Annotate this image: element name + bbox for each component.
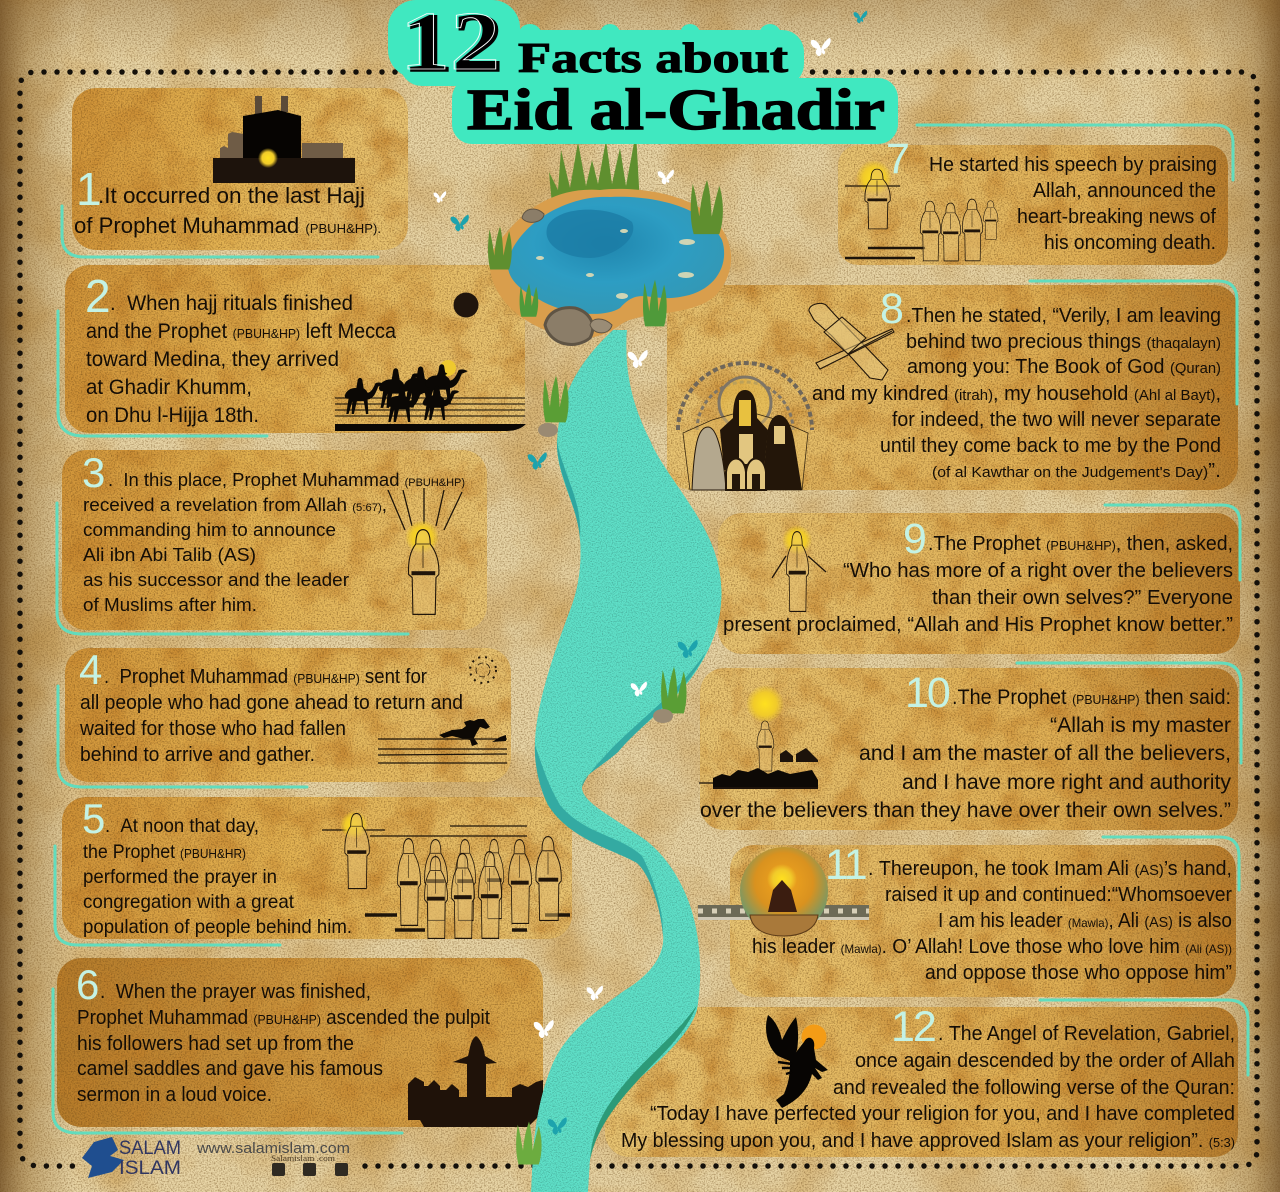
panel: fact 2 (65, 265, 526, 433)
panel 9 text (723, 533, 1233, 636)
panel 5 text: the Prophet (PBUH&HR) (83, 841, 246, 863)
number 10: 10 (905, 669, 950, 717)
icon: pond rocks (522, 209, 612, 344)
panel 7 text: Allah, announced the (1033, 180, 1216, 202)
title line Eid al-Ghadir: Eid al-Ghadir (467, 77, 885, 142)
panel 11 text (752, 858, 1232, 984)
panel 2 background (65, 265, 525, 433)
panel 5 text: congregation with a great (83, 891, 295, 913)
panel 1 text: of Prophet Muhammad (PBUH&HP). (74, 213, 381, 238)
panel 2 text: . When hajj rituals finished (110, 292, 353, 315)
teal butterflies (451, 11, 867, 1135)
number 1: 1 (76, 163, 102, 215)
panel 11 text: raised it up and continued:“Whomsoever (885, 884, 1232, 906)
icon: Kaaba with crowd (213, 96, 355, 183)
panel: fact 1 (72, 88, 408, 250)
panel 12 text: once again descended by the order of Allah (855, 1050, 1235, 1072)
icon: dark moon (454, 292, 478, 318)
panel 4 text (79, 666, 463, 766)
icon: Prophet leading prayer with congregation (322, 811, 570, 938)
panel: fact 6 (57, 958, 543, 1127)
panel 3 text (83, 469, 465, 615)
icon: orb with raised hands (698, 847, 869, 936)
lily pads (536, 229, 695, 299)
panel: fact 3 (62, 449, 487, 630)
panel 9 text: .The Prophet (PBUH&HP), then, asked, (928, 533, 1233, 555)
panel 5 background (62, 797, 572, 939)
panel: fact 9 (718, 513, 1240, 654)
panel 10 text: and I am the master of all the believers, (859, 742, 1231, 765)
icon: Prophet with raised arms (772, 525, 826, 611)
panel 12 background (605, 1007, 1238, 1157)
panel 8 text: among you: The Book of God (Quran) (907, 356, 1221, 378)
panel 7 text: He started his speech by praising (929, 154, 1217, 176)
title background bubble (388, 0, 898, 144)
panel: fact 12 (605, 1003, 1238, 1157)
panel 12 text: “Today I have perfected your religion for you, and I have completed (650, 1103, 1235, 1125)
panel 4 text: . Prophet Muhammad (PBUH&HP) sent for (104, 666, 427, 688)
panel 6 text: sermon in a loud voice. (77, 1084, 272, 1106)
top grass behind pond (549, 132, 640, 205)
number 2: 2 (85, 270, 111, 322)
panel 2 text: on Dhu l-Hijja 18th. (86, 404, 259, 427)
panel 7 text: his oncoming death. (1044, 232, 1216, 254)
panel 12 text: . The Angel of Revelation, Gabriel, (938, 1023, 1235, 1045)
panel 10 text: .The Prophet (PBUH&HP) then said: (952, 686, 1231, 709)
panel 2 text: toward Medina, they arrived (86, 348, 339, 371)
panel 8 text: and my kindred (itrah), my household (Ahl al Bayt), (812, 383, 1221, 405)
title line Facts about: Facts about (518, 36, 788, 82)
panel 2 text: and the Prophet (PBUH&HP) left Mecca (86, 320, 396, 343)
panel 8 text: for indeed, the two will never separate (892, 409, 1221, 431)
icon: galloping horseman (378, 719, 507, 763)
panel 4 text: behind to arrive and gather. (80, 744, 315, 766)
panel 7 text: heart-breaking news of (1017, 206, 1216, 228)
panel 10 text: over the believers than they have over their own selves.” (700, 799, 1231, 822)
panel 8 background (667, 285, 1238, 490)
icon: Prophet on pulpit with crowd (408, 1036, 543, 1127)
panel 6 text: his followers had set up from the (77, 1033, 354, 1055)
logo mark (82, 1137, 124, 1178)
title (388, 0, 898, 144)
panel 12 text: My blessing upon you, and I have approved Islam as your religion”. (5:3) (621, 1130, 1235, 1152)
grass clumps (488, 180, 723, 1164)
panel 5 text: . At noon that day, (105, 815, 259, 837)
panel 5 text (83, 815, 352, 938)
pond (490, 189, 731, 344)
icon: small sun (470, 657, 496, 683)
panel 7 background (838, 145, 1228, 265)
panel 3 background (62, 450, 487, 630)
panel 3 text: . In this place, Prophet Muhammad (PBUH&HP) (108, 469, 465, 490)
panel 3 text: commanding him to announce (83, 519, 336, 540)
number 3: 3 (82, 449, 105, 496)
panel 6 text: . When the prayer was finished, (100, 981, 371, 1003)
panel 2 text: at Ghadir Khumm, (86, 376, 252, 399)
panel 9 background (718, 513, 1240, 654)
panel 11 text: . Thereupon, he took Imam Ali (AS)’s hand, (868, 858, 1232, 880)
panel 1 text: .It occurred on the last Hajj (98, 183, 365, 208)
panel 10 text (700, 686, 1231, 822)
panel 11 text: and oppose those who oppose him” (925, 962, 1232, 984)
panel 2 text (86, 292, 396, 427)
panel 8 text: .Then he stated, “Verily, I am leaving (906, 305, 1221, 327)
panel 3 text: Ali ibn Abi Talib (AS) (83, 544, 256, 565)
panel: fact 4 (65, 646, 511, 782)
panel 9 text: than their own selves?” Everyone (932, 587, 1233, 609)
panel 7 text (929, 154, 1217, 254)
white butterflies (433, 38, 831, 1038)
panel 10 background (700, 668, 1238, 830)
panel 10 text: and I have more right and authority (902, 771, 1231, 794)
panel 10 text: “Allah is my master (1050, 714, 1231, 737)
river (531, 330, 722, 1192)
panel 4 text: all people who had gone ahead to return and (80, 692, 463, 714)
panel 3 text: of Muslims after him. (83, 594, 257, 615)
panel 6 text: Prophet Muhammad (PBUH&HP) ascended the pulpit (77, 1007, 490, 1029)
panel: fact 7 (838, 135, 1228, 265)
panel 5 text: population of people behind him. (83, 916, 352, 938)
panel 8 text: behind two precious things (thaqalayn) (906, 331, 1221, 353)
logo and social footer (82, 1137, 350, 1179)
icon: angel Gabriel (766, 1015, 828, 1108)
panel 12 text (621, 1023, 1235, 1152)
icon: Prophet with family and halo (678, 363, 812, 490)
number 4: 4 (79, 646, 102, 693)
logo wordmark: ISLAM (119, 1158, 181, 1179)
panel 3 text: as his successor and the leader (83, 569, 349, 590)
panel 1 background (72, 88, 408, 250)
logo wordmark: SALAM (119, 1138, 181, 1159)
river rocks (538, 423, 673, 723)
number 6: 6 (76, 961, 99, 1008)
panel 3 text: received a revelation from Allah (5:67), (83, 494, 387, 515)
panel 1 text (74, 183, 381, 238)
panel 8 text: (of al Kawthar on the Judgement's Day) ”. (932, 460, 1221, 482)
panel 12 text: and revealed the following verse of the Quran: (833, 1077, 1235, 1099)
panel 9 text: “Who has more of a right over the believers (843, 560, 1233, 582)
icon: Prophet speaking to followers (845, 160, 998, 261)
number 7: 7 (886, 135, 910, 183)
panel 9 text: present proclaimed, “Allah and His Prophet know better.” (723, 614, 1233, 636)
panel 5 text: performed the prayer in (83, 866, 277, 888)
social handle: Salamislam .com (271, 1154, 336, 1163)
panel 8 text: until they come back to me by the Pond (880, 435, 1221, 457)
number 5: 5 (82, 795, 105, 842)
social icons (272, 1163, 348, 1176)
website: www.salamislam.com (196, 1140, 350, 1157)
icon: Prophet receiving revelation (388, 488, 462, 614)
icon: Prophet above the crowd (699, 685, 818, 788)
panel: fact 11 (698, 841, 1236, 997)
panel: fact 8 (667, 285, 1238, 490)
panel 8 text (812, 305, 1221, 482)
panel 11 background (730, 845, 1236, 997)
panel 11 text: I am his leader (Mawla), Ali (AS) is also (938, 910, 1232, 932)
panel 4 text: waited for those who had fallen (79, 718, 346, 740)
number 9: 9 (903, 515, 927, 563)
teal panel brackets (53, 125, 1248, 1133)
panel 4 background (65, 648, 511, 782)
number 12: 12 (891, 1003, 935, 1051)
panel 6 text: camel saddles and gave his famous (77, 1058, 383, 1080)
panel: fact 5 (62, 795, 572, 939)
icon: Quran on stand (809, 303, 894, 380)
logo wordmark (119, 1138, 181, 1179)
number 8: 8 (880, 285, 904, 333)
panel: fact 10 (699, 668, 1238, 830)
panel 6 text (77, 981, 490, 1106)
number 11: 11 (825, 841, 866, 889)
panel 6 background (57, 958, 543, 1127)
icon: camel caravan (335, 360, 526, 431)
panel 11 text: his leader (Mawla). O’ Allah! Love those who love him (Ali (AS)) (752, 936, 1232, 958)
